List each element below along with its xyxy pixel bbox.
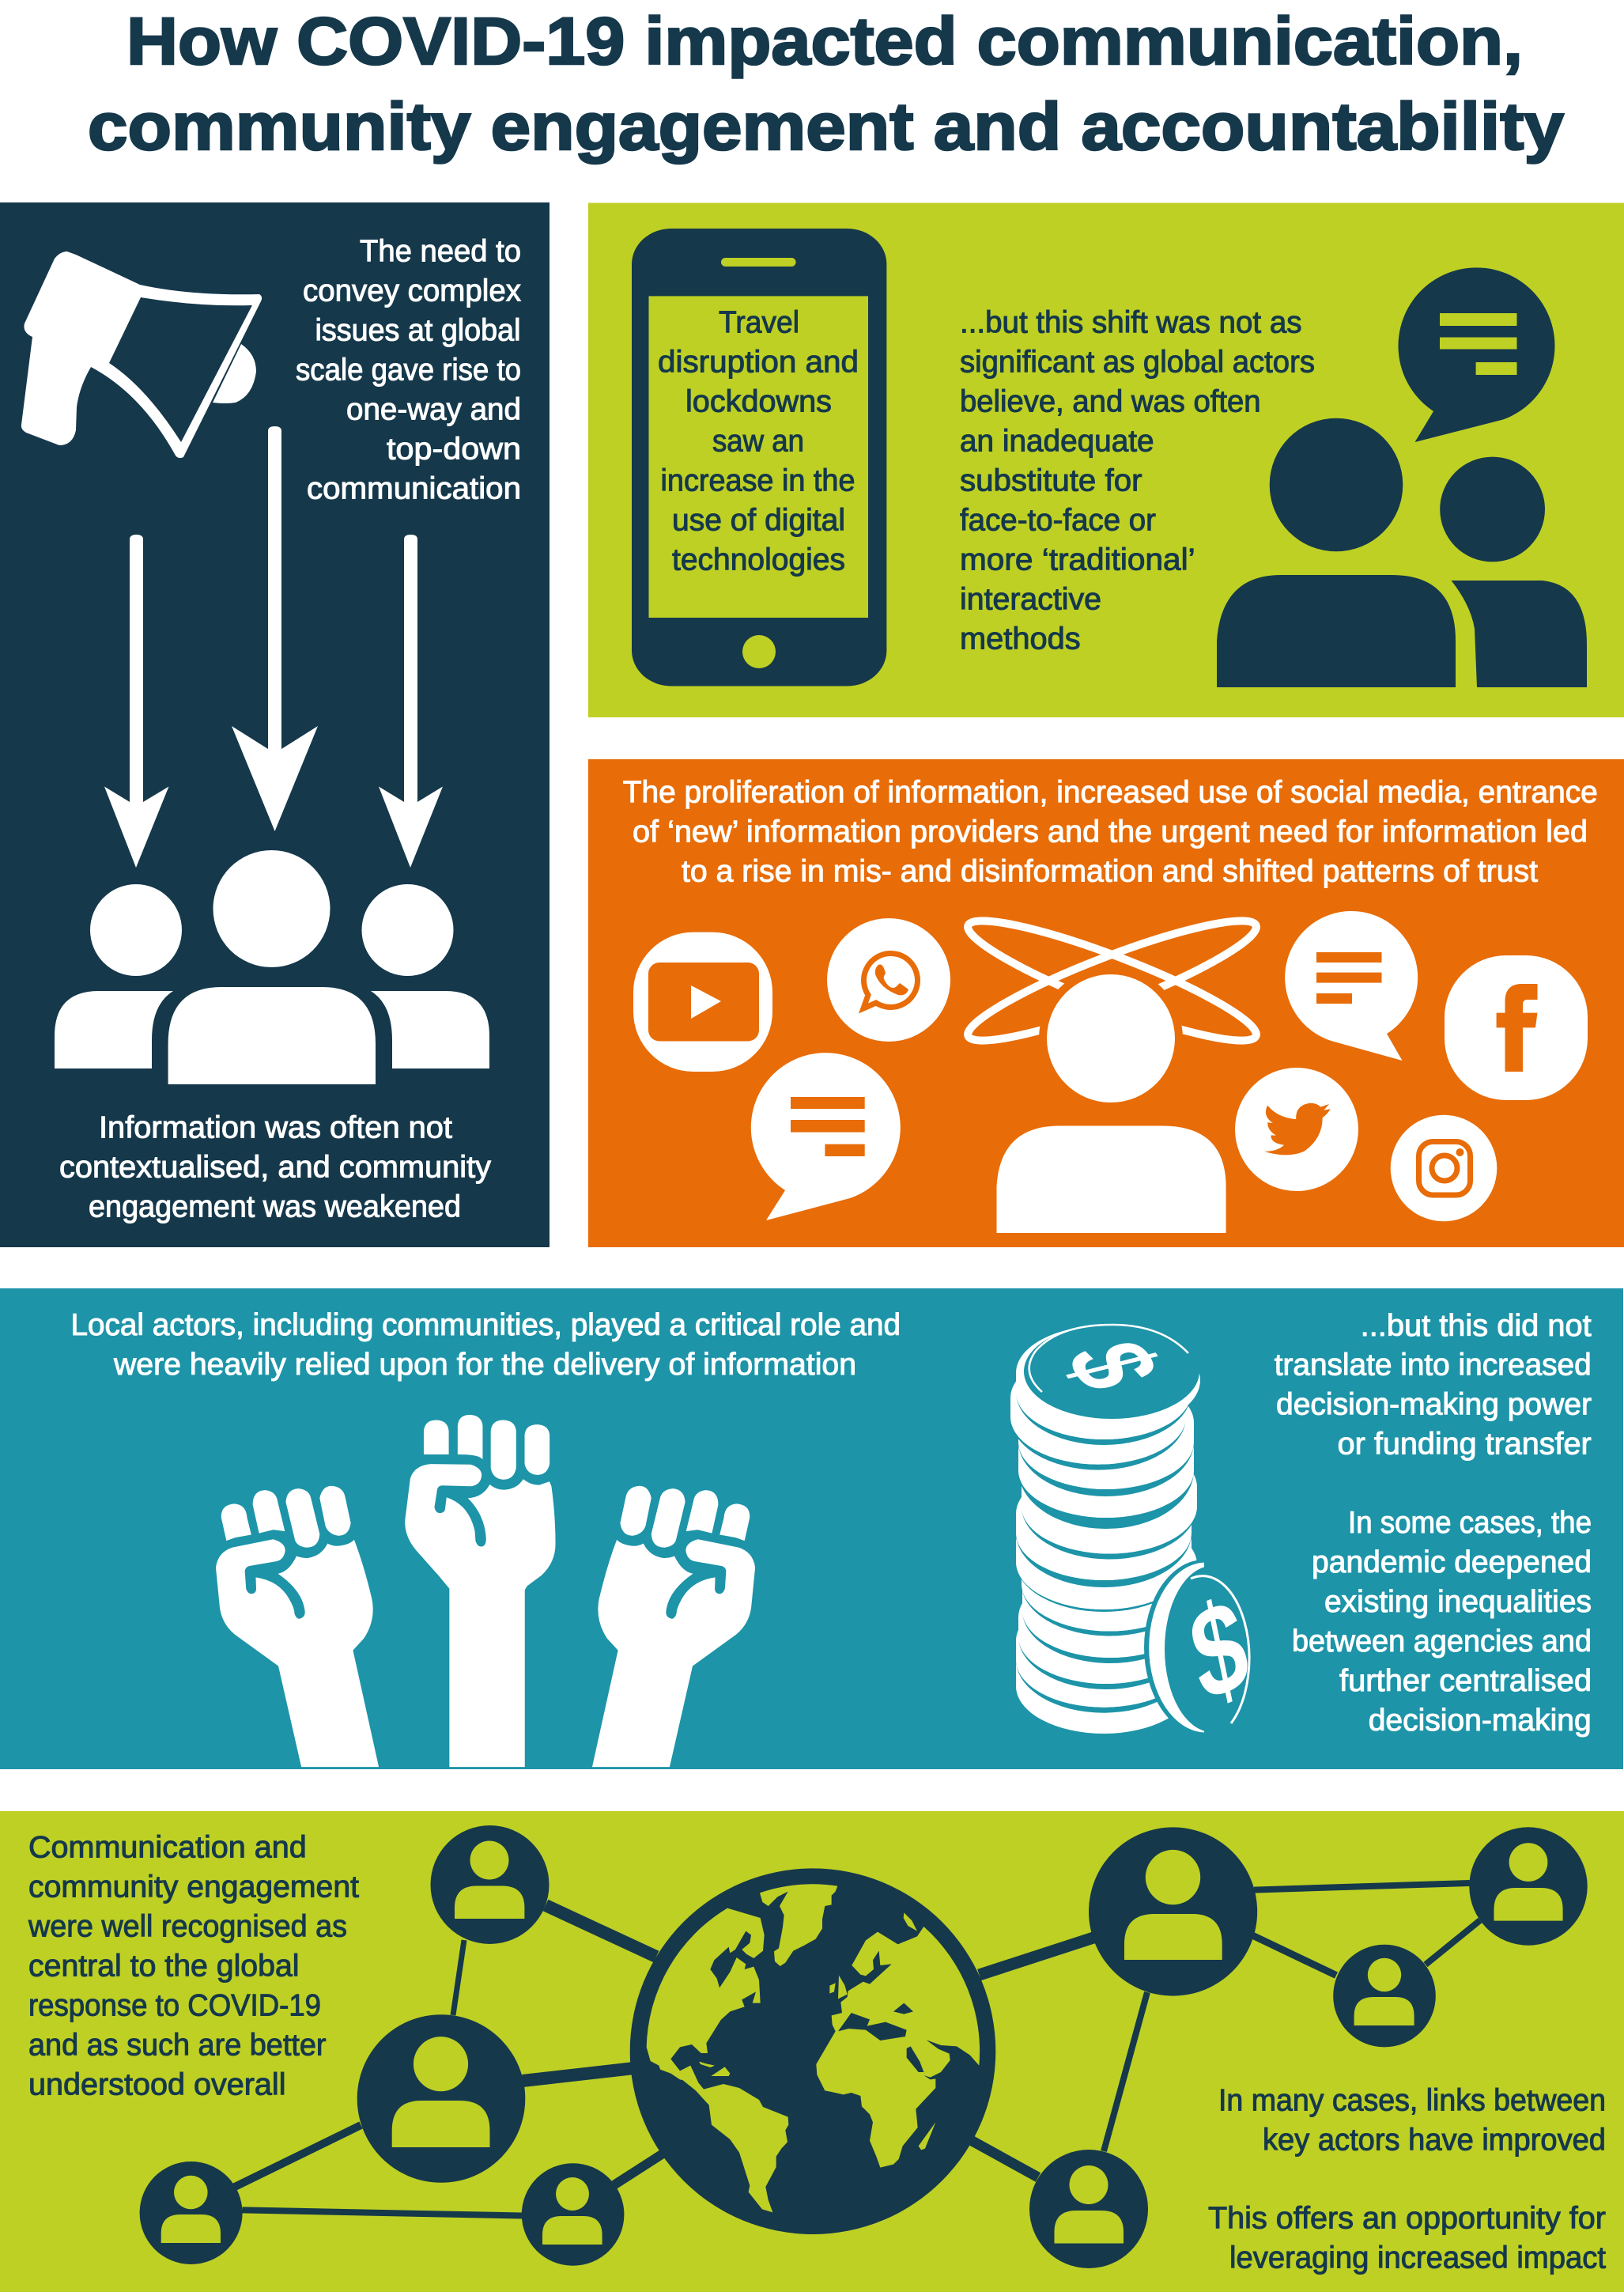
icon: central person [996,966,1226,1233]
panel: local actors and funding [0,1288,1623,1769]
node: actor middle right [1333,1945,1436,2047]
panel: global network of actors [0,1811,1624,2292]
icon: megaphone [21,252,262,458]
icon: two people talking [1217,418,1587,687]
panel: digital technologies [588,202,1624,717]
icon: three raised fists [216,1416,755,1767]
icon: YouTube [633,932,772,1072]
icon: WhatsApp [827,918,950,1042]
text: local actors: Local actors, including communities, played a critical role and [71,1308,901,1342]
text: travel disruption: use of digital [672,503,845,538]
node: actor large left [357,2014,525,2183]
network links [235,1883,1480,2216]
text: travel disruption: Travel [719,305,799,340]
text: travel disruption: lockdowns [685,384,832,419]
text: travel disruption [658,305,859,577]
text: funding transfer and inequalities: decision-making [1369,1704,1592,1738]
icon: speech bubble right [1285,911,1418,1061]
icon: stack of coins: $ [1039,1331,1186,1400]
icon: Instagram [1391,1115,1497,1221]
text: proliferation of information [623,775,1598,889]
icon: stack of coins [1010,1324,1264,1735]
icon: speech bubble [1398,267,1554,442]
text: local actors: were heavily relied upon for the delivery of information [113,1348,856,1382]
icon: crossed orbits [959,902,1265,1059]
text: communication recognised [28,1830,359,2102]
text: the need to convey: issues at global [315,313,520,348]
title: community engagement and accountability [88,89,1564,164]
text: links improved [1208,2083,1606,2275]
text: communication recognised: were well recognised as [28,1909,347,1944]
text: communication recognised: central to the global [28,1949,299,1984]
text: shift not as significant: believe, and was often [960,384,1260,419]
icon: Twitter [1235,1068,1358,1191]
text: funding transfer and inequalities: In some cases, the [1348,1506,1592,1540]
text: information not contextualised: Information was often not [99,1110,452,1145]
text: the need to convey: The need to [360,234,521,269]
panel: one-way top-down communication [0,202,550,1247]
text: proliferation of information: to a rise in mis- and disinformation and shifted patterns of trust [682,854,1538,889]
text: shift not as significant: more ‘traditional’ [960,543,1195,577]
text: shift not as significant: significant as global actors [960,345,1315,380]
node: actor bottom middle right [1029,2150,1148,2268]
text: information not contextualised: engagement was weakened [89,1189,461,1224]
text: the need to convey: convey complex [303,274,521,308]
text: travel disruption: disruption and [658,345,859,380]
text: communication recognised: Communication and [28,1830,307,1865]
icon: leaning coin [1144,1560,1264,1735]
arrows: pointing down at people [104,426,443,868]
node: actor top left [430,1825,549,1944]
text: travel disruption: increase in the [661,463,855,498]
text: shift not as significant: methods [960,622,1081,656]
text: proliferation of information: of ‘new’ information providers and the urgent need for information led [633,815,1588,849]
title: How COVID-19 impacted communication, [127,4,1523,78]
text: shift not as significant: ...but this shift was not as [960,305,1301,340]
text: communication recognised: and as such are better [28,2028,327,2063]
text: funding transfer and inequalities [1275,1309,1592,1738]
text: communication recognised: understood overall [28,2067,286,2102]
text: the need to convey: scale gave rise to [296,353,521,388]
icon: smartphone [632,229,886,686]
text: the need to convey [296,234,521,506]
panel: mis- and disinformation [588,759,1624,1247]
text: proliferation of information: The proliferation of information, increased use of social media, entrance [623,775,1598,810]
text: funding transfer and inequalities: between agencies and [1292,1624,1592,1658]
text: shift not as significant: an inadequate [960,424,1154,459]
text: links improved: This offers an opportunity for [1208,2202,1606,2235]
text: funding transfer and inequalities: ...but this did not [1361,1309,1592,1343]
text: funding transfer and inequalities: pandemic deepened [1312,1545,1592,1579]
text: funding transfer and inequalities: translate into increased [1275,1348,1592,1382]
node: actor bottom centre [522,2163,624,2266]
text: funding transfer and inequalities: existing inequalities [1324,1585,1592,1619]
node: actor bottom left [140,2162,243,2264]
icon: left fist [216,1487,379,1767]
text: the need to convey: one-way and [346,392,521,427]
text: communication recognised: community engagement [28,1870,359,1904]
text: links improved: key actors have improved [1263,2123,1606,2158]
text: funding transfer and inequalities: or funding transfer [1338,1427,1592,1462]
node: actor large right [1089,1827,1257,1996]
icon: right fist [592,1487,755,1767]
text: shift not as significant: substitute for [960,463,1142,498]
text: the need to convey: communication [307,471,521,506]
text: funding transfer and inequalities: decision-making power [1276,1387,1592,1422]
text: travel disruption: technologies [672,543,845,577]
icon: leaning coin: $ [1180,1571,1259,1730]
text: local actors [71,1308,901,1382]
text: information not contextualised [59,1110,492,1224]
icon: centre fist [405,1416,556,1767]
text: funding transfer and inequalities: further centralised [1339,1664,1592,1698]
text: shift not as significant [960,305,1315,656]
text: communication recognised: response to COVID-19 [28,1988,321,2023]
text: the need to convey: top-down [387,432,521,467]
text: shift not as significant: interactive [960,582,1101,617]
text: shift not as significant: face-to-face or [960,503,1156,538]
icon: group of three people [55,850,489,1084]
text: information not contextualised: contextualised, and community [59,1150,492,1185]
text: links improved: In many cases, links between [1218,2083,1606,2118]
icon: speech bubble left [751,1053,901,1220]
text: travel disruption: saw an [712,424,804,459]
icon: Facebook [1445,955,1588,1100]
text: links improved: leveraging increased impact [1229,2241,1606,2275]
title [88,4,1564,164]
icon: globe [630,1868,995,2234]
node: actor top right [1469,1827,1588,1946]
